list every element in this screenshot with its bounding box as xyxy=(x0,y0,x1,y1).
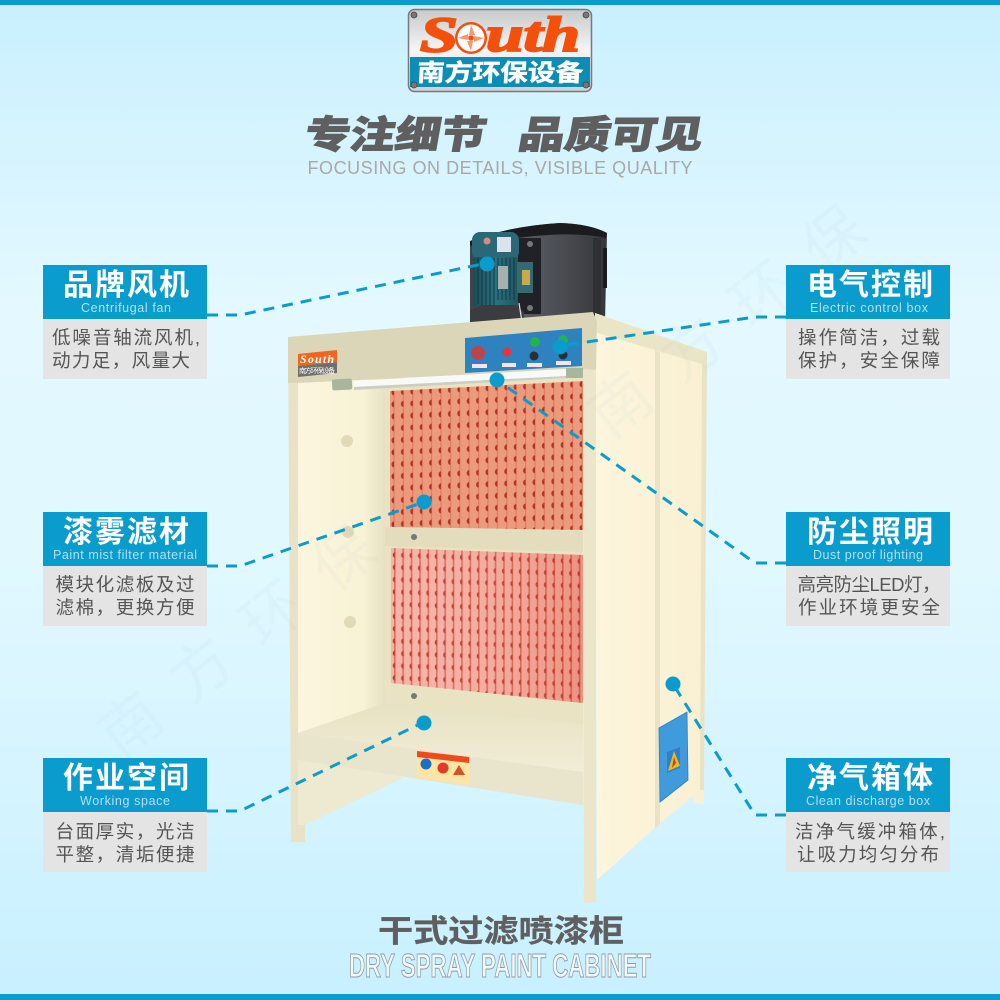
headline part one: 专注细节 xyxy=(301,114,490,157)
heading: 电气控制 xyxy=(807,269,935,302)
heading: 防尘照明 xyxy=(807,516,935,549)
red lamp xyxy=(502,348,512,356)
description xyxy=(798,574,940,618)
logo wordmark xyxy=(420,6,580,62)
green lamp xyxy=(530,337,540,347)
panel: clean discharge box xyxy=(786,758,950,872)
description: 保护，安全保障 xyxy=(798,350,940,371)
right divider strip xyxy=(655,350,660,829)
watermark: 南方环保 xyxy=(87,496,412,770)
logo chinese name: 南方环保设备 xyxy=(416,59,584,87)
left front column xyxy=(288,337,305,842)
watermark xyxy=(87,176,902,770)
panel: electric control box xyxy=(786,265,950,379)
heading: 漆雾滤材 xyxy=(63,516,191,549)
english label: Electric control box xyxy=(810,301,929,315)
description xyxy=(56,821,194,865)
product title: 干式过滤喷漆柜 xyxy=(378,914,624,949)
description xyxy=(798,327,940,371)
description: 模块化滤板及过 xyxy=(56,574,194,595)
description: 动力足，风量大 xyxy=(52,350,190,371)
upper filter xyxy=(390,381,583,530)
watermark: 南方环保 xyxy=(577,176,902,450)
right edge strip xyxy=(700,352,707,790)
right side face xyxy=(595,313,707,880)
description: 高亮防尘LED灯， xyxy=(798,574,940,595)
description: 滤棉，更换方便 xyxy=(56,597,194,618)
bolts xyxy=(341,435,417,699)
description xyxy=(795,821,945,865)
emergency button xyxy=(471,346,485,360)
heading: 作业空间 xyxy=(63,762,191,795)
cabinet badge: South xyxy=(300,352,334,366)
description: 作业环境更安全 xyxy=(798,597,940,618)
control panel xyxy=(465,328,582,373)
fan drum xyxy=(470,223,607,322)
english label: Working space xyxy=(80,794,170,808)
english label: Clean discharge box xyxy=(806,794,931,808)
bottom bar xyxy=(0,994,1000,1000)
headline part two: 品质可见 xyxy=(515,114,707,157)
description: 洁净气缓冲箱体, xyxy=(795,821,945,842)
description xyxy=(56,574,194,618)
logo plate xyxy=(408,10,592,92)
floor xyxy=(298,703,583,772)
warning label xyxy=(417,751,469,785)
back frame xyxy=(385,378,583,728)
lower filter xyxy=(391,548,583,703)
right front column xyxy=(583,320,596,903)
logo xyxy=(408,6,592,92)
english label: Dust proof lighting xyxy=(813,548,923,562)
top header beam xyxy=(288,312,597,383)
description: 台面厚实，光洁 xyxy=(56,821,194,842)
top bar xyxy=(0,0,1000,5)
panel: working space xyxy=(43,758,207,872)
leader lines xyxy=(207,263,786,815)
LED lamp xyxy=(332,368,583,391)
english subtitle: FOCUSING ON DETAILS, VISIBLE QUALITY xyxy=(308,158,692,178)
logo screws xyxy=(411,12,589,88)
logo wordmark: S xyxy=(420,6,458,62)
motor xyxy=(470,232,533,323)
heading: 净气箱体 xyxy=(807,762,935,795)
description xyxy=(52,327,200,371)
logo fan icon xyxy=(455,22,487,54)
description: 让吸力均匀分布 xyxy=(797,844,939,865)
callout dots xyxy=(416,256,680,730)
english label: Paint mist filter material xyxy=(53,548,197,562)
cabinet badge: 南方环保设备 xyxy=(299,366,335,375)
product english title: DRY SPRAY PAINT CABINET xyxy=(349,947,651,984)
green lamp two xyxy=(558,335,568,345)
description: 平整，清垢便捷 xyxy=(56,844,194,865)
heading: 品牌风机 xyxy=(63,269,191,302)
description: 操作简洁，过载 xyxy=(798,327,940,348)
logo wordmark: uth xyxy=(486,6,580,62)
right top strip xyxy=(595,313,707,365)
english label: Centrifugal fan xyxy=(81,301,171,315)
headline xyxy=(301,114,707,157)
cabinet xyxy=(288,223,707,903)
left leg panel xyxy=(298,760,405,825)
filter divider xyxy=(385,527,583,552)
cabinet badge xyxy=(298,350,337,377)
blue access panel xyxy=(659,712,688,802)
panel: centrifugal fan xyxy=(43,265,207,379)
description: 低噪音轴流风机, xyxy=(52,327,200,348)
panel: dust proof lighting xyxy=(786,512,950,626)
front lip xyxy=(298,733,583,805)
panel: paint mist filter xyxy=(43,512,207,626)
logo banner xyxy=(410,57,590,87)
inner left wall xyxy=(297,378,386,733)
